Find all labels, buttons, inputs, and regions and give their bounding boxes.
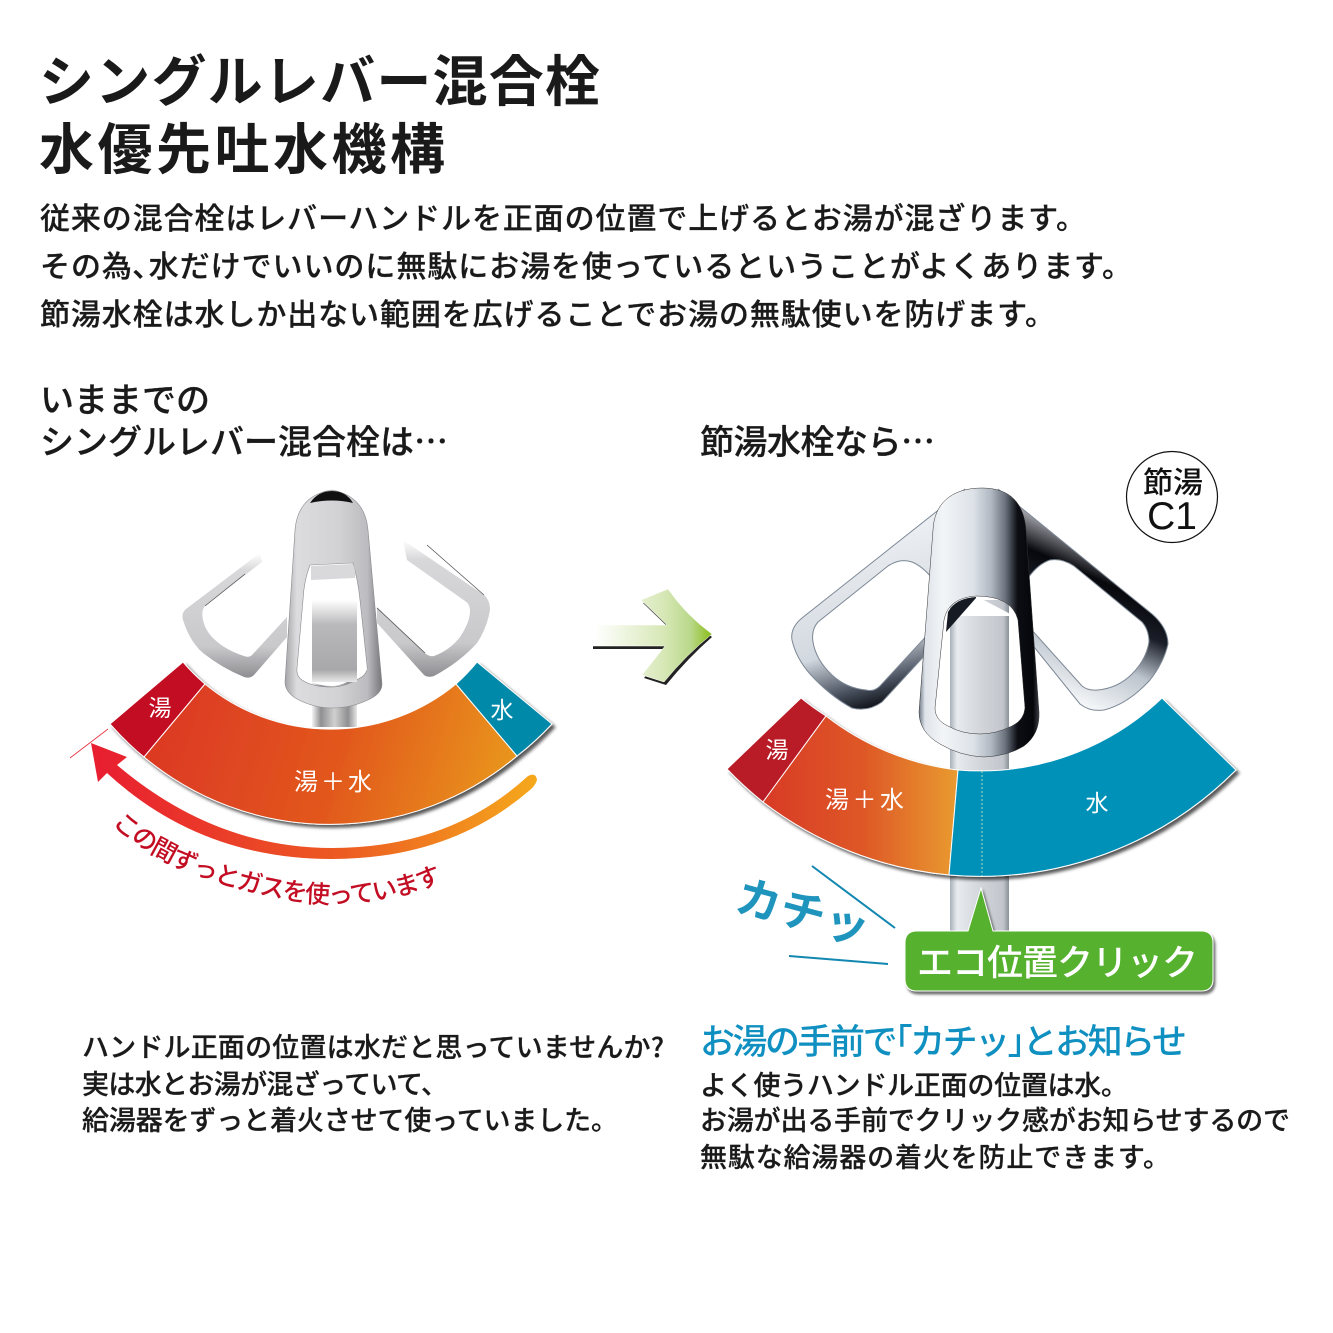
- panel: dial sections: [110, 662, 552, 824]
- heading: conventional faucet: いままでの: [40, 382, 210, 420]
- title: 水優先吐水機構: [39, 119, 445, 181]
- icon: conventional faucet: [182, 490, 490, 727]
- label: hot: 湯: [148, 695, 172, 721]
- panel: dial sections: [727, 698, 1236, 876]
- text block: water-saving explanation: よく使うハンドル正面の位置は水。: [700, 1071, 1128, 1101]
- panel: water-saving faucet illustration: [727, 452, 1236, 991]
- intro text: 節湯水栓は水しか出ない範囲を広げることでお湯の無駄使いを防げます。: [40, 299, 1055, 332]
- icon: C1 badge: C1: [1147, 495, 1197, 538]
- heading: conventional faucet: [40, 382, 448, 464]
- icon: C1 badge: [1126, 452, 1218, 542]
- text block: conventional explanation: 実は水とお湯が混ざっていて、: [82, 1069, 448, 1100]
- arrow: gas use range: [70, 729, 537, 859]
- label: cold: 水: [490, 697, 514, 723]
- intro text: 従来の混合栓はレバーハンドルを正面の位置で上げるとお湯が混ざります。: [40, 202, 1086, 236]
- icon: C1 badge: 節湯: [1143, 467, 1203, 500]
- label: mixed: 湯＋水: [294, 769, 372, 796]
- text block: conventional explanation: 給湯器をずっと着火させて使っていました。: [82, 1106, 618, 1136]
- text block: water-saving explanation: [700, 1071, 1290, 1173]
- intro text: その為､水だけでいいのに無駄にお湯を使っているということがよくあります。: [40, 251, 1132, 284]
- label: mixed: 湯＋水: [825, 787, 904, 814]
- icon: water-saving faucet: [792, 488, 1168, 935]
- panel: conventional faucet illustration: [70, 490, 558, 906]
- heading: conventional faucet: シングルレバー混合栓は…: [40, 415, 448, 464]
- text block: water-saving explanation: 無駄な給湯器の着火を防止できます。: [700, 1143, 1170, 1173]
- heading: water-saving faucet: 節湯水栓なら…: [700, 415, 935, 464]
- title: [39, 51, 600, 181]
- callout: gas burning text: この間ずっとガスを使っています: [116, 814, 436, 906]
- text block: conventional explanation: ハンドル正面の位置は水だと思っていませんか?: [82, 1026, 664, 1065]
- heading: click notification: お湯の手前で｢カチッ｣とお知らせ: [700, 1023, 1187, 1062]
- text block: water-saving explanation: お湯が出る手前でクリック感がお知らせするので: [700, 1106, 1290, 1136]
- arrow: transition: [591, 589, 712, 685]
- callout: click sound: カチッ: [730, 870, 875, 955]
- title: シングルレバー混合栓: [39, 51, 600, 113]
- intro text: [40, 202, 1132, 332]
- callout: eco position click: [905, 888, 1213, 991]
- text block: conventional explanation: [82, 1026, 664, 1136]
- callout: eco position click: エコ位置クリック: [917, 942, 1198, 983]
- label: cold: 水: [1086, 790, 1108, 816]
- label: hot: 湯: [766, 737, 788, 763]
